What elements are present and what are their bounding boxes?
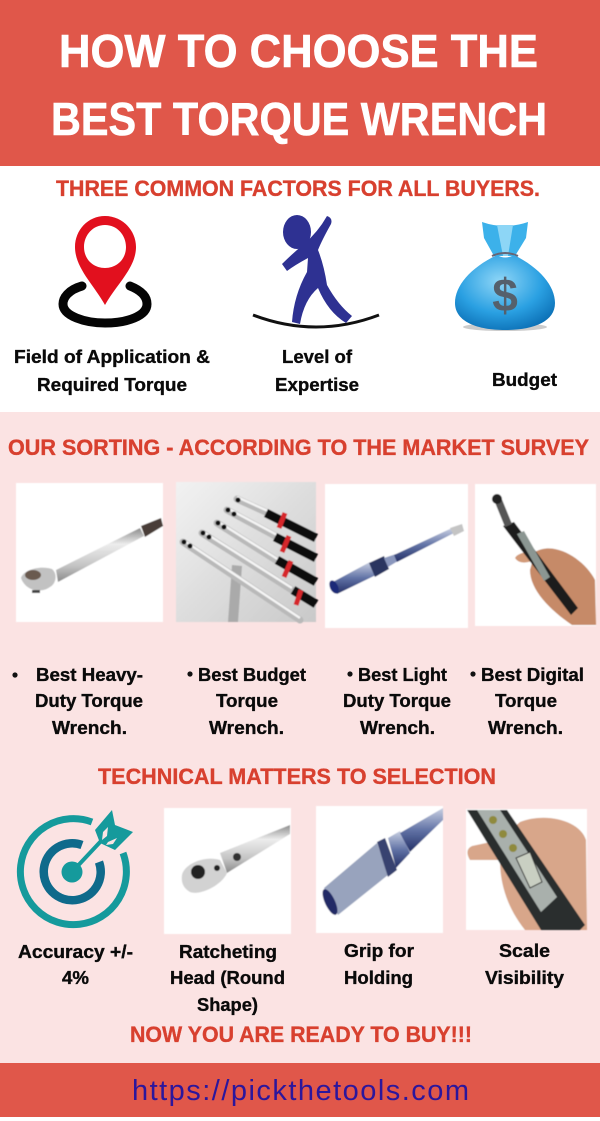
title: HOW TO CHOOSE THE — [59, 25, 538, 77]
technical labels: Scale — [499, 941, 550, 961]
icon: target with arrow — [20, 810, 133, 925]
technical labels: Visibility — [485, 968, 564, 988]
icon: balancing figure on rope — [253, 215, 379, 327]
category labels: Duty Torque — [35, 691, 143, 711]
photo: light duty wrench — [325, 484, 468, 628]
factor labels: Field of Application & — [14, 347, 210, 367]
factor labels: Budget — [492, 370, 557, 390]
photo: grip — [316, 806, 443, 933]
factor labels — [14, 347, 557, 395]
technical labels: Shape) — [197, 995, 258, 1015]
technical labels: Ratcheting — [179, 942, 277, 962]
factor labels: Expertise — [275, 375, 359, 395]
url: https://pickthetools.com — [132, 1075, 469, 1107]
title — [51, 25, 547, 145]
technical labels: Accuracy +/- — [18, 942, 133, 962]
heading: technical matters: TECHNICAL MATTERS TO SELECTION — [98, 764, 496, 789]
technical labels: Grip for — [344, 941, 414, 961]
category labels: Wrench. — [52, 718, 127, 738]
category labels: Best Heavy- — [36, 665, 143, 685]
category labels: Wrench. — [360, 718, 435, 738]
header banner — [0, 0, 600, 166]
icon: location pin — [63, 216, 147, 323]
category labels: Torque — [495, 691, 557, 711]
photo: budget wrench set — [176, 482, 316, 622]
category labels: Best Digital — [481, 665, 584, 685]
photo: ratcheting head — [164, 808, 291, 934]
category labels — [12, 665, 584, 738]
category labels: Wrench. — [488, 718, 563, 738]
icon: money bag — [455, 222, 555, 331]
call to action: NOW YOU ARE READY TO BUY!!! — [130, 1022, 472, 1047]
page background: pink section — [0, 412, 600, 1063]
title: BEST TORQUE WRENCH — [51, 93, 547, 145]
dollar sign: $ — [492, 269, 518, 321]
factor labels: Level of — [282, 347, 353, 367]
technical labels: Holding — [344, 968, 413, 988]
photo: heavy-duty wrench — [16, 483, 163, 622]
heading: three common factors: THREE COMMON FACTORS FOR ALL BUYERS. — [56, 176, 540, 201]
technical labels: Head (Round — [170, 968, 285, 988]
photo: digital wrench in hand — [475, 484, 596, 626]
footer banner — [0, 1063, 600, 1117]
photo: scale display — [466, 809, 587, 930]
category labels: Best Budget — [198, 665, 306, 685]
category labels: Torque — [216, 691, 278, 711]
category labels: Wrench. — [209, 718, 284, 738]
heading: our sorting: OUR SORTING - ACCORDING TO THE MARKET SURVEY — [8, 435, 589, 460]
technical labels — [18, 941, 564, 1015]
factor labels: Required Torque — [37, 375, 187, 395]
category labels: Best Light — [358, 665, 447, 685]
category labels: Duty Torque — [343, 691, 451, 711]
technical labels: 4% — [62, 968, 89, 988]
